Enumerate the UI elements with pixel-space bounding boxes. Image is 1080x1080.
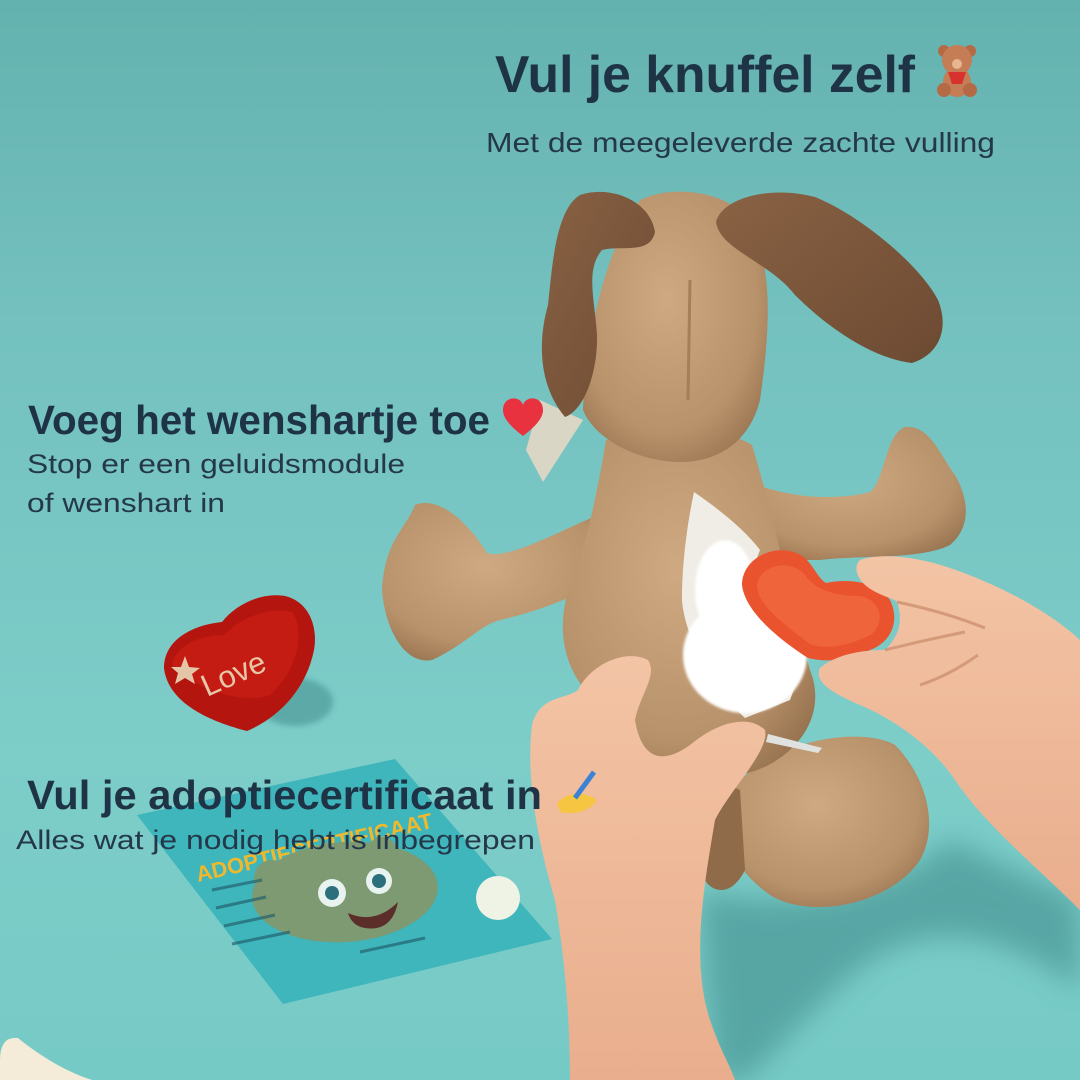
tag [526,400,583,482]
right hand [819,556,1080,910]
icon: teddy bear [937,45,977,97]
left hand [530,656,765,1080]
zipper pull [766,734,822,753]
orange heart module [742,550,894,660]
head [583,192,768,462]
certificate bear face [249,836,441,948]
zipper opening [682,492,808,718]
heading: adoptiecertificaat: Vul je adoptiecertificaat in [27,772,542,818]
left ear [542,192,655,417]
subtitle: Met de meegeleverde zachte vulling [486,127,995,158]
text: wenshart description: Stop er een geluidsmodule [27,449,405,479]
satin love heart [164,595,333,731]
legs [724,737,929,907]
corner detail [0,1038,92,1080]
text: wenshart description: of wenshart in [27,488,225,518]
left arm [382,503,612,660]
finger separators [885,602,985,685]
icon: red heart [503,398,543,436]
title: Vul je knuffel zelf [495,46,916,104]
right arm [745,427,966,560]
certificate fine print [212,880,425,952]
certificate heading: ADOPTIECERTIFICAAT [194,808,435,887]
white stuffing [683,540,807,713]
cast shadow [700,840,1080,1080]
certificate seal [476,876,520,920]
certificate card [137,759,552,1004]
text: certificate description: Alles wat je nodig hebt is inbegrepen [16,825,535,855]
torso [563,429,815,777]
icon: writing hand [557,772,597,813]
right ear [716,192,943,363]
star and love stitching: Love [196,644,271,703]
plush bunny [382,192,966,907]
heading: wenshartje: Voeg het wenshartje toe [28,397,490,443]
